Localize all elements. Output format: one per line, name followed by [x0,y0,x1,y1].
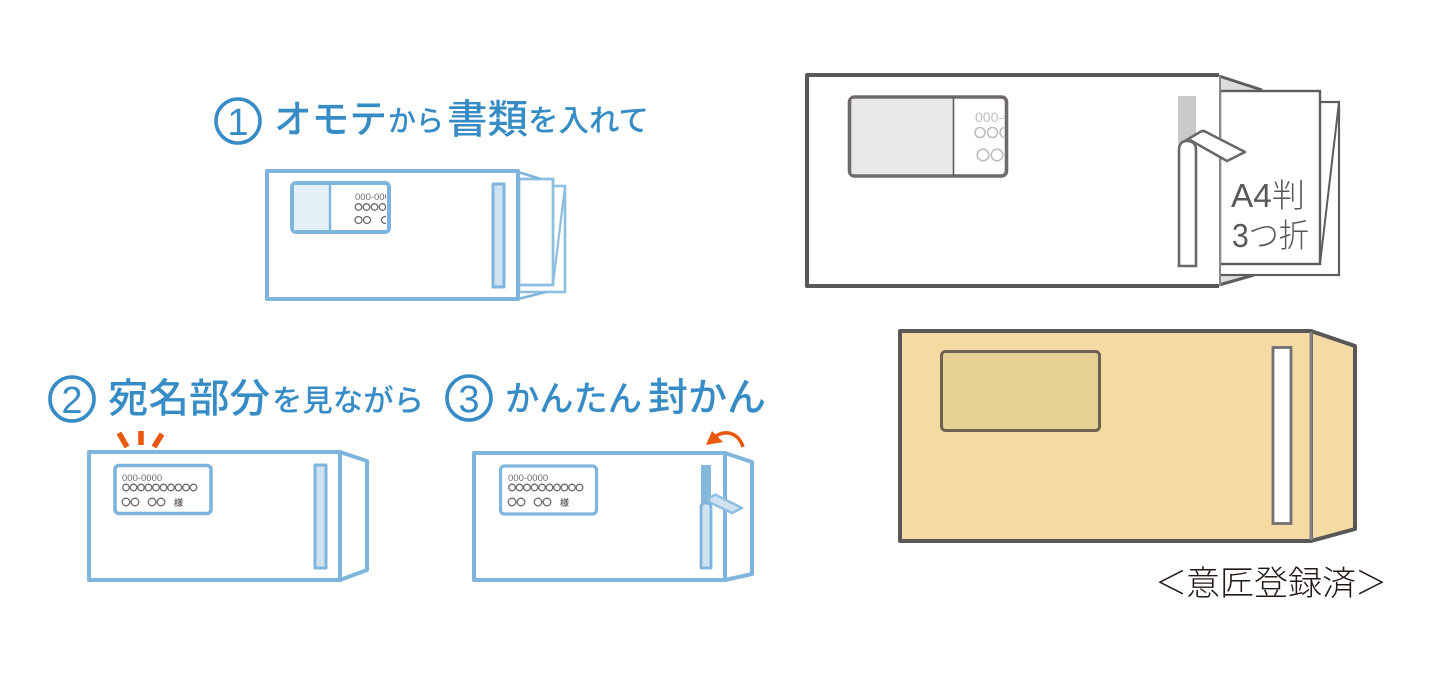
heading: step 2: 宛名部分 [108,377,270,421]
address window: 000-000 [975,109,1027,125]
heading: step 3: 3 [458,379,480,421]
address window: 000-0000 [355,192,395,203]
seal tape [1178,96,1245,266]
heading: step 3: 封 [648,377,688,420]
address window: 様 [560,497,569,508]
address window [942,352,1100,430]
seal strip [1273,348,1291,524]
seal tape [701,465,742,568]
heading: step 1 [216,98,649,144]
address window [500,466,596,514]
envelope: step 3 with seal tape [474,453,752,580]
caption: design registered: ＞ [1355,565,1387,601]
address window [115,466,211,514]
seal strip [315,465,326,568]
papers [518,172,565,299]
paper label: A4判 [1231,177,1305,214]
icon: orange curved arrow [706,431,743,447]
address window: 様 [174,497,183,508]
heading: step 2: を見ながら [272,385,424,418]
envelope: step 1 with papers inserted [267,171,565,299]
paper label [1231,177,1309,254]
back paper [1220,102,1339,275]
heading: step 2 [50,377,424,422]
envelope: large white with A4 paper [807,75,1339,286]
envelope: kraft coloured [900,331,1355,541]
icon: orange emphasis marks [119,431,162,447]
caption: design registered: 意匠登録済 [1186,565,1356,603]
address window [850,97,1027,176]
heading: step 1: から [388,106,444,138]
heading: step 2: 2 [61,380,83,422]
front paper [1220,91,1339,264]
heading: step 3: かん [688,377,766,420]
address window [292,183,395,232]
address window: 000-0000 [508,473,548,484]
seal strip [493,184,504,287]
heading: step 1: 書類 [447,98,528,142]
heading: step 3: かんたん [505,380,642,419]
caption: design registered: ＜ [1155,565,1187,601]
address window: 000-0000 [122,473,162,484]
envelope: step 2 [89,452,367,580]
heading: step 3 [447,376,766,421]
heading: step 1: オモテ [274,99,387,142]
heading: step 1: 1 [227,102,249,144]
heading: step 1: を入れて [528,105,649,138]
flap [1219,76,1262,285]
paper label: 3つ折 [1232,217,1309,254]
